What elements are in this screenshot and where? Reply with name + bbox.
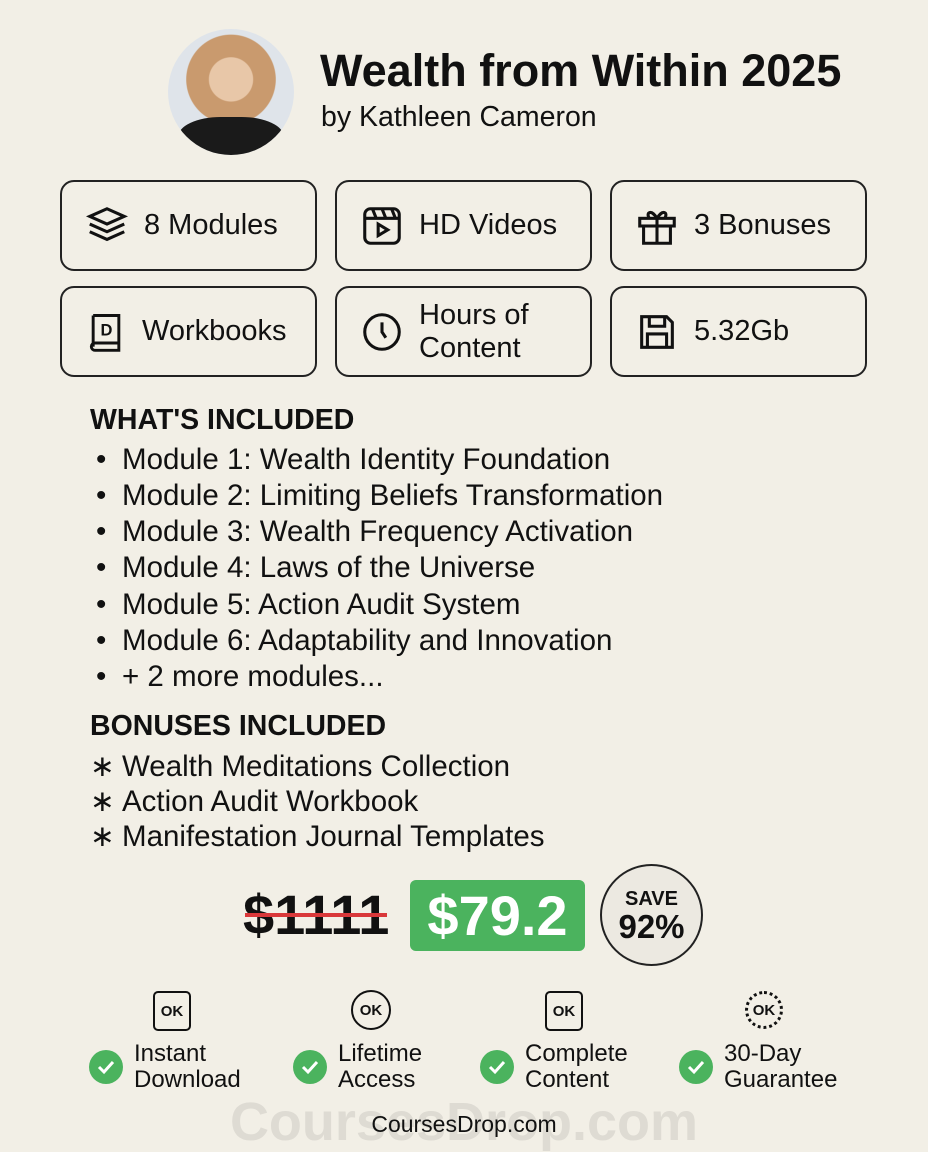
module list: • <box>96 624 106 657</box>
module list <box>96 443 663 693</box>
save badge: SAVE <box>625 888 678 910</box>
feature: instant download: Instant <box>134 1040 206 1067</box>
feature box: size <box>610 286 867 377</box>
icon: OK complete: OK <box>553 1002 575 1020</box>
title: Wealth from Within 2025 <box>320 45 841 96</box>
module list: • <box>96 479 106 512</box>
bonus list: ∗ <box>90 785 115 818</box>
feature box: hours: Hours of <box>419 298 529 330</box>
watermark: CoursesDrop.com <box>230 1092 698 1152</box>
feature box: workbooks <box>60 286 317 377</box>
feature box: workbooks: Workbooks <box>142 315 287 347</box>
feature box: bonuses: 3 Bonuses <box>694 209 831 241</box>
new price: $79.2 <box>427 884 568 947</box>
feature box: modules <box>60 180 317 271</box>
icon: OK instant <box>153 991 191 1031</box>
feature box: videos: HD Videos <box>419 209 557 241</box>
icon: OK lifetime: OK <box>360 1002 382 1018</box>
heading: bonuses: BONUSES INCLUDED <box>90 710 386 742</box>
bonus list: ∗ <box>90 820 115 853</box>
module list: • <box>96 443 106 476</box>
bonus list: Manifestation Journal Templates <box>122 820 545 853</box>
icon: OK lifetime <box>351 990 391 1030</box>
module list: • <box>96 551 106 584</box>
feature: guarantee <box>679 1040 837 1093</box>
heading: what's included: WHAT'S INCLUDED <box>90 404 354 436</box>
bonus list: Wealth Meditations Collection <box>122 750 510 783</box>
bonus list <box>90 750 545 853</box>
bonus list: ∗ <box>90 750 115 783</box>
feature box: bonuses <box>610 180 867 271</box>
module list: • <box>96 515 106 548</box>
module list: • <box>96 588 106 621</box>
feature: guarantee: Guarantee <box>724 1066 837 1093</box>
icon: OK guarantee: OK <box>753 1002 775 1018</box>
module list: Module 2: Limiting Beliefs Transformation <box>122 479 663 512</box>
feature: lifetime access <box>293 1040 422 1093</box>
icon: OK instant: OK <box>161 1002 183 1020</box>
feature: instant download <box>89 1040 241 1093</box>
subtitle: author: by Kathleen Cameron <box>321 101 597 133</box>
module list: Module 3: Wealth Frequency Activation <box>122 515 633 548</box>
save badge: 92% <box>618 908 685 945</box>
module list: • <box>96 660 106 693</box>
module list: Module 6: Adaptability and Innovation <box>122 624 612 657</box>
feature: guarantee: 30-Day <box>724 1040 801 1067</box>
module list: + 2 more modules... <box>122 660 384 693</box>
feature: complete content: Complete <box>525 1040 628 1067</box>
feature: lifetime access: Lifetime <box>338 1040 422 1067</box>
old price: $1111 <box>243 883 389 946</box>
photo: author portrait <box>168 29 294 155</box>
bonus list: Action Audit Workbook <box>122 785 418 818</box>
feature: instant download: Download <box>134 1066 241 1093</box>
feature box: hours <box>335 286 592 377</box>
module list: Module 5: Action Audit System <box>122 588 520 621</box>
feature box: size: 5.32Gb <box>694 315 789 347</box>
module list: Module 1: Wealth Identity Foundation <box>122 443 610 476</box>
feature: lifetime access: Access <box>338 1066 415 1093</box>
feature box: hours: Content <box>419 332 521 364</box>
save badge <box>600 864 703 966</box>
footer site: CoursesDrop.com <box>371 1111 557 1137</box>
icon: OK guarantee <box>745 991 783 1029</box>
feature box: videos <box>335 180 592 271</box>
module list: Module 4: Laws of the Universe <box>122 551 535 584</box>
feature: complete content <box>480 1040 628 1093</box>
feature: complete content: Content <box>525 1066 609 1093</box>
icon: OK complete <box>545 991 583 1031</box>
feature box: workbooks: D <box>100 321 113 339</box>
feature box: modules: 8 Modules <box>144 209 278 241</box>
